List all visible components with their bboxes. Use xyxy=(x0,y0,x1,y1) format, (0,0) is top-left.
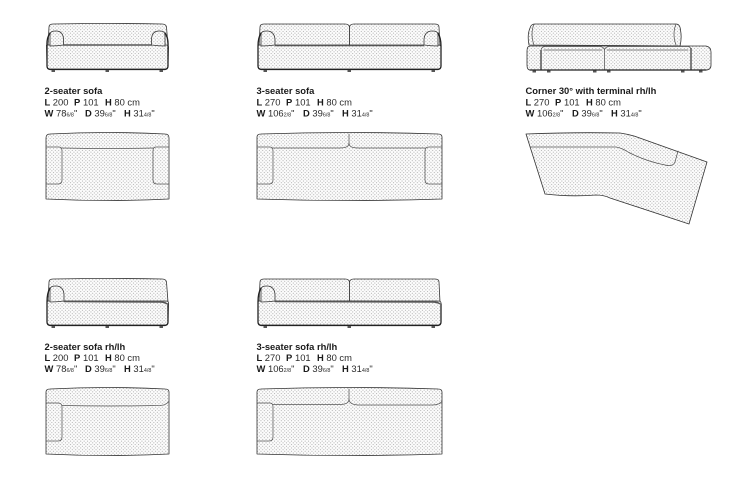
specs: 3-seater sofa: 101 xyxy=(295,96,311,108)
specs: 2-seater sofa rh/lh: 39 xyxy=(94,363,105,374)
specs: 2-seater sofa: H xyxy=(105,96,112,108)
specs: 3-seater sofa: D xyxy=(303,108,310,118)
specs: corner sofa: Corner 30° with terminal rh/lh xyxy=(526,85,657,96)
specs: 2-seater sofa rh/lh: P xyxy=(74,352,80,363)
specs: 3-seater sofa: 106 xyxy=(268,108,284,118)
panel: corner 30 degree with terminal xyxy=(526,24,711,224)
specs: 3-seater sofa: H xyxy=(317,96,324,108)
plan view: 3-seater sofa xyxy=(257,132,442,200)
specs: 3-seater sofa rh/lh: L xyxy=(256,352,262,363)
plan view: corner sofa xyxy=(526,133,707,224)
specs: 3-seater sofa rh/lh: D xyxy=(303,363,310,374)
specs: 2-seater sofa rh/lh: 2-seater sofa rh/lh xyxy=(44,341,126,352)
specs: 2-seater sofa rh/lh: 101 xyxy=(83,352,99,363)
specs: 2-seater sofa: 78 xyxy=(56,108,66,118)
specs: 2-seater sofa rh/lh: 6/8" xyxy=(66,363,77,374)
plan view: 2-seater sofa xyxy=(46,132,169,200)
specs: corner sofa: P xyxy=(555,96,561,108)
specs: corner sofa: 31 xyxy=(620,108,631,118)
specs: 3-seater sofa rh/lh: H xyxy=(342,363,349,374)
specs: 3-seater sofa rh/lh: W xyxy=(256,363,266,374)
specs: 3-seater sofa xyxy=(256,85,373,118)
specs: 2-seater sofa rh/lh: 4/8" xyxy=(144,363,155,374)
specs: 3-seater sofa rh/lh: 270 xyxy=(265,352,280,363)
specs: 3-seater sofa: H xyxy=(342,108,349,118)
specs: 2-seater sofa: L xyxy=(44,96,50,108)
specs: 2-seater sofa: 80 cm xyxy=(114,96,140,108)
specs: corner sofa: 4/8" xyxy=(631,108,642,118)
specs: corner sofa: H xyxy=(611,108,618,118)
specs: corner sofa: D xyxy=(572,108,579,118)
specs: 3-seater sofa: 80 cm xyxy=(326,96,352,108)
panel: 2-seater sofa xyxy=(44,24,169,200)
specs: 2-seater sofa rh/lh: 31 xyxy=(133,363,144,374)
specs: corner sofa: 80 cm xyxy=(595,96,621,108)
specs: corner sofa: L xyxy=(526,96,532,108)
specs: corner sofa xyxy=(526,85,657,118)
specs: corner sofa: 39 xyxy=(581,108,592,118)
specs: 3-seater sofa: L xyxy=(256,96,262,108)
specs: 3-seater sofa rh/lh xyxy=(256,341,373,374)
specs: 3-seater sofa: 6/8" xyxy=(323,108,334,118)
specs: 2-seater sofa: 4/8" xyxy=(144,108,155,118)
specs: 3-seater sofa: 4/8" xyxy=(362,108,373,118)
specs: 2-seater sofa xyxy=(44,85,155,118)
specs: 3-seater sofa: 31 xyxy=(351,108,362,118)
specs: 2-seater sofa rh/lh: H xyxy=(105,352,112,363)
specs: 3-seater sofa: 39 xyxy=(312,108,323,118)
plan view: 3-seater sofa rh/lh xyxy=(257,388,442,456)
specs: 2-seater sofa: 200 xyxy=(53,96,68,108)
specs: 3-seater sofa: 3-seater sofa xyxy=(256,85,315,96)
panel: 3-seater sofa xyxy=(256,24,442,200)
specs: 2-seater sofa rh/lh: 200 xyxy=(53,352,68,363)
front view: 3-seater sofa xyxy=(258,24,441,72)
specs: 3-seater sofa rh/lh: 6/8" xyxy=(323,363,334,374)
specs: 3-seater sofa: 2/8" xyxy=(284,108,294,118)
specs: 2-seater sofa: D xyxy=(85,108,92,118)
specs: 2-seater sofa rh/lh: 6/8" xyxy=(105,363,116,374)
specs: 3-seater sofa rh/lh: 80 cm xyxy=(326,352,352,363)
specs: 2-seater sofa rh/lh: W xyxy=(44,363,54,374)
specs: 3-seater sofa rh/lh: 106 xyxy=(268,363,284,374)
specs: 2-seater sofa rh/lh: D xyxy=(85,363,92,374)
specs: 2-seater sofa: 101 xyxy=(83,96,99,108)
specs: 3-seater sofa rh/lh: 39 xyxy=(312,363,323,374)
front view: 2-seater sofa rh/lh xyxy=(47,278,168,328)
panel: 3-seater sofa rh/lh xyxy=(256,279,442,456)
front view: 3-seater sofa rh/lh xyxy=(258,279,441,328)
specs: 2-seater sofa rh/lh xyxy=(44,341,155,374)
specs: 2-seater sofa: H xyxy=(124,108,131,118)
specs: 3-seater sofa rh/lh: 3-seater sofa rh/lh xyxy=(256,341,338,352)
specs: 2-seater sofa rh/lh: 80 cm xyxy=(114,352,140,363)
specs: 2-seater sofa: 2-seater sofa xyxy=(44,85,103,96)
specs: corner sofa: 6/8" xyxy=(592,108,603,118)
specs: 2-seater sofa rh/lh: 78 xyxy=(56,363,66,374)
specs: 2-seater sofa rh/lh: H xyxy=(124,363,131,374)
specs: 2-seater sofa: 6/8" xyxy=(105,108,116,118)
specs: 3-seater sofa rh/lh: 31 xyxy=(351,363,362,374)
specs: corner sofa: W xyxy=(526,108,534,118)
specs: 3-seater sofa rh/lh: 101 xyxy=(295,352,311,363)
specs: corner sofa: 101 xyxy=(564,96,580,108)
plan view: 2-seater sofa rh/lh xyxy=(46,388,169,456)
specs: 3-seater sofa: W xyxy=(256,108,266,118)
front view: corner sofa xyxy=(527,24,711,72)
specs: 3-seater sofa: 270 xyxy=(265,96,280,108)
specs: corner sofa: 2/8" xyxy=(553,108,563,118)
specs: 2-seater sofa: 31 xyxy=(133,108,144,118)
specs: 2-seater sofa: 6/8" xyxy=(66,108,77,118)
panel: 2-seater sofa rh/lh xyxy=(44,278,169,456)
specs: 3-seater sofa rh/lh: 2/8" xyxy=(284,363,294,374)
specs: corner sofa: 106 xyxy=(537,108,553,118)
specs: 3-seater sofa rh/lh: H xyxy=(317,352,324,363)
specs: 2-seater sofa: P xyxy=(74,96,80,108)
specs: corner sofa: 270 xyxy=(534,96,549,108)
front view: 2-seater sofa xyxy=(46,24,168,72)
specs: 3-seater sofa rh/lh: 4/8" xyxy=(362,363,373,374)
specs: corner sofa: H xyxy=(586,96,593,108)
specs: 3-seater sofa: P xyxy=(286,96,292,108)
specs: 3-seater sofa rh/lh: P xyxy=(286,352,292,363)
specs: 2-seater sofa: W xyxy=(44,108,54,118)
specs: 2-seater sofa: 39 xyxy=(94,108,105,118)
specs: 2-seater sofa rh/lh: L xyxy=(44,352,50,363)
